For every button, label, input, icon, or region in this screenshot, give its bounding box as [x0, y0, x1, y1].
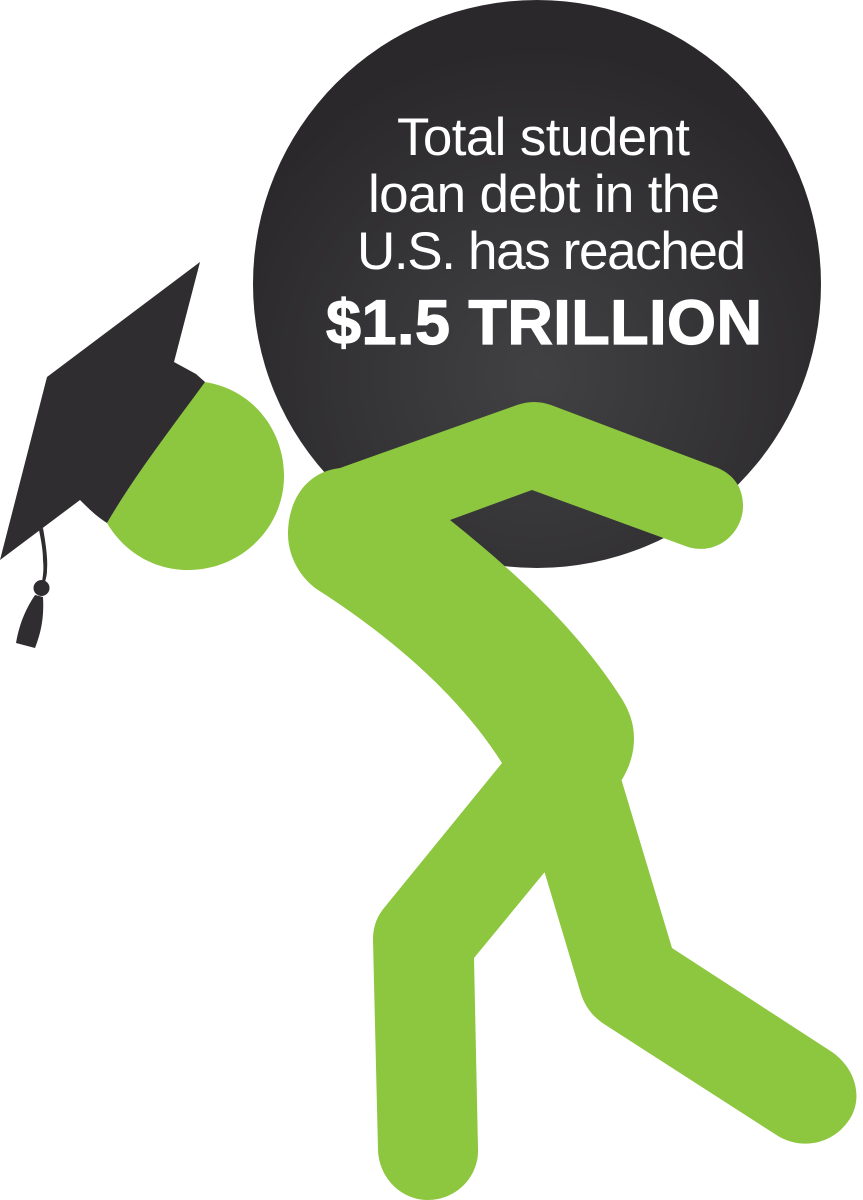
torso	[288, 468, 634, 1200]
tassel cord	[39, 528, 47, 582]
tassel knot	[34, 580, 50, 596]
head	[107, 382, 284, 570]
tassel	[16, 595, 43, 648]
ball text: U.S. has reached	[357, 222, 746, 281]
ball text: $1.5 TRILLION	[326, 288, 762, 358]
mortarboard	[0, 262, 205, 560]
ball text: loan debt in the	[368, 165, 720, 224]
arm	[340, 402, 743, 590]
ball text	[326, 108, 762, 358]
debt ball	[253, 0, 821, 568]
figure: green person	[107, 382, 856, 1200]
graduation cap	[0, 262, 205, 648]
back leg	[520, 740, 856, 1144]
ball text: Total student	[397, 108, 690, 167]
